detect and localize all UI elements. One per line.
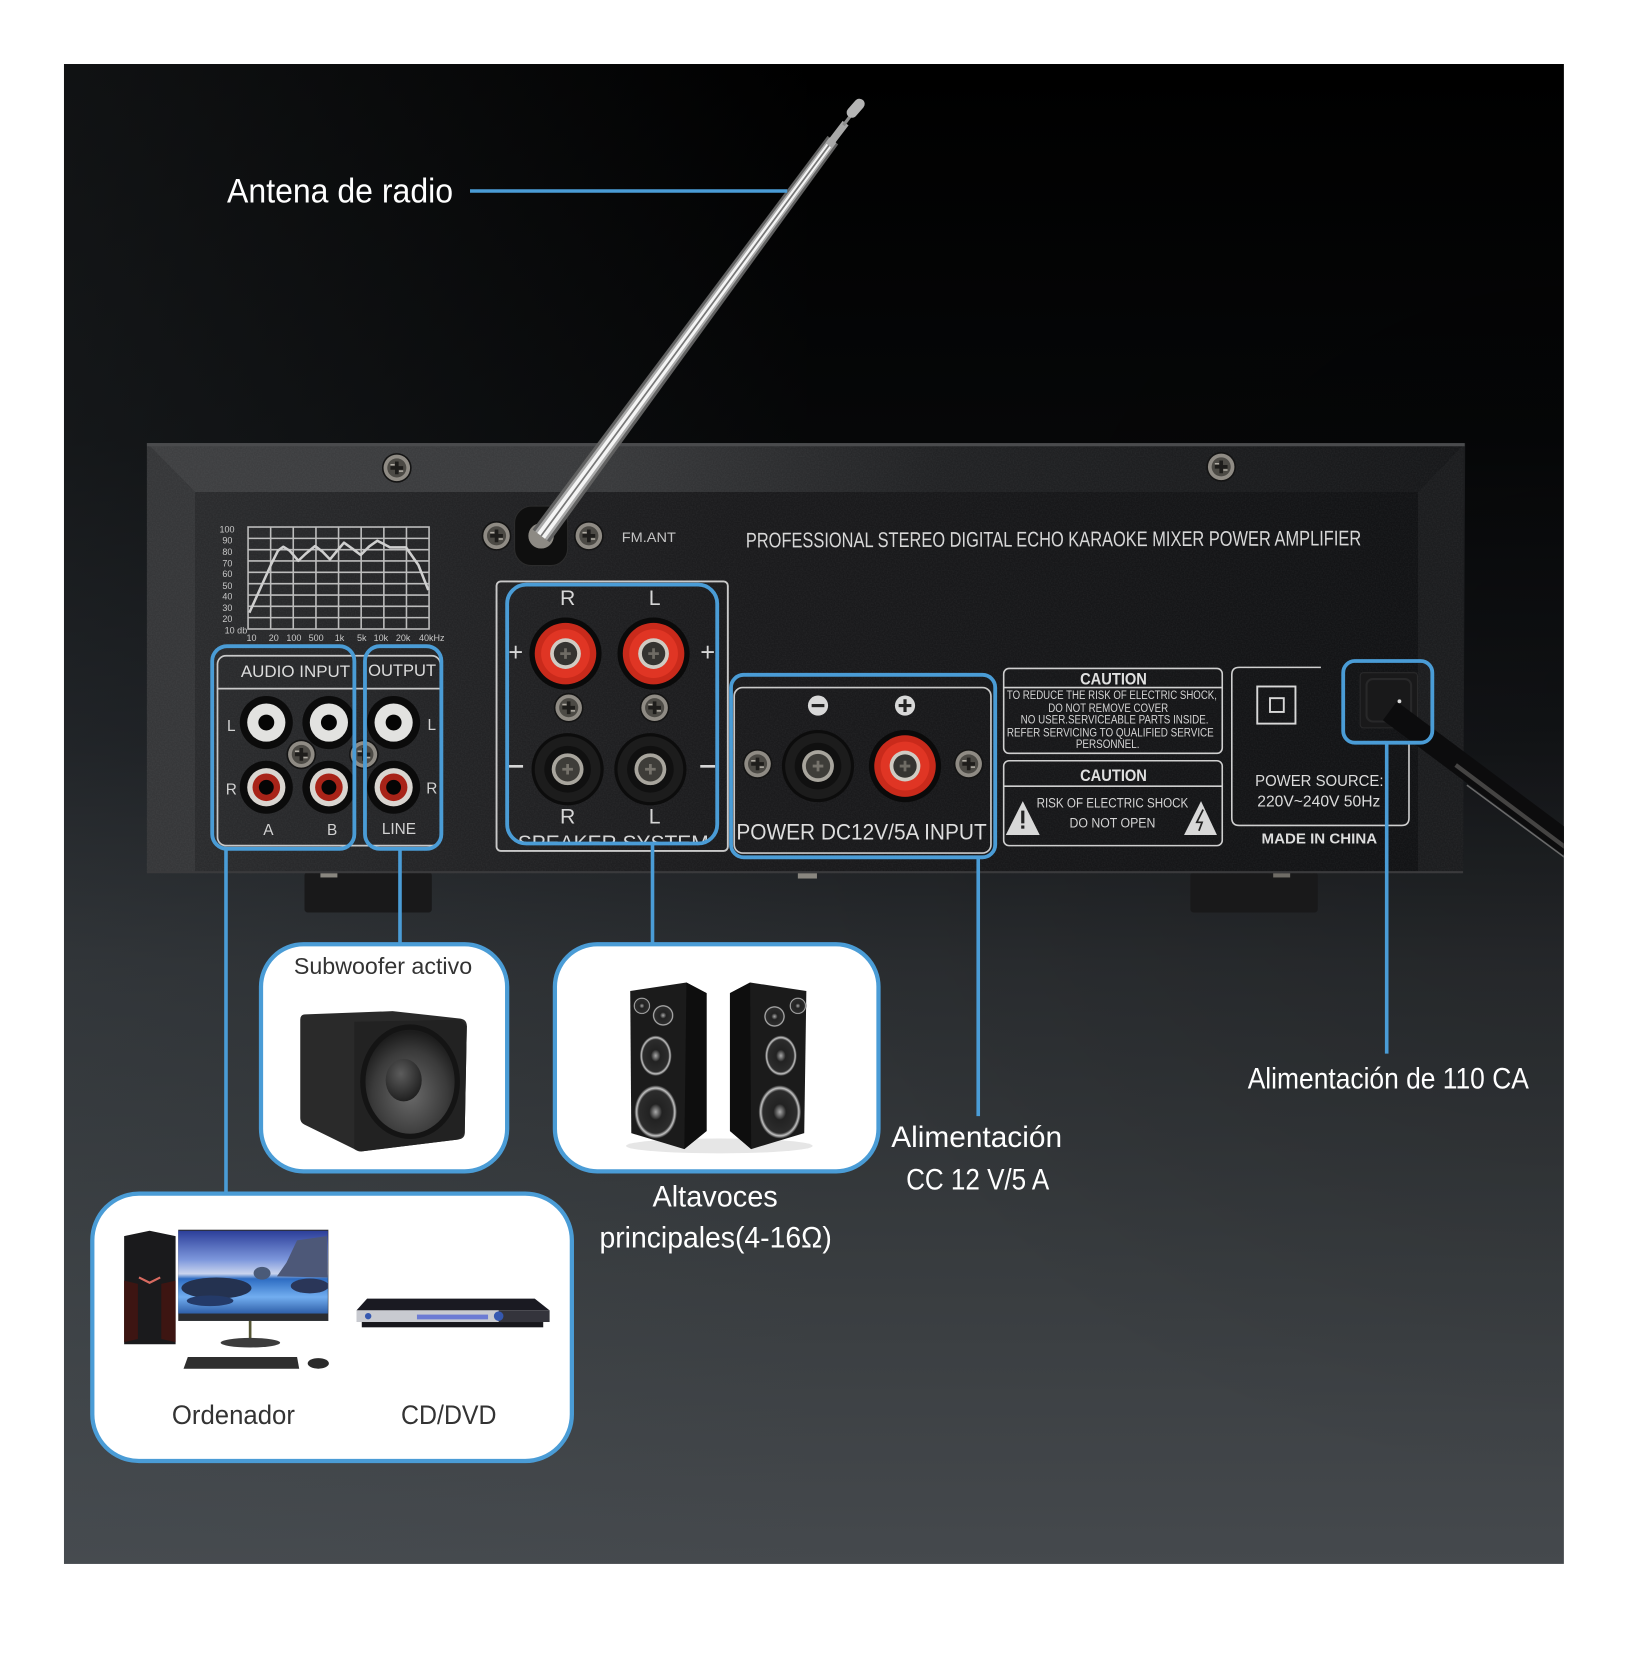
fm antenna label: FM.ANT (622, 530, 676, 545)
icon: subwoofer (300, 1011, 467, 1151)
frequency response chart (219, 525, 445, 643)
amplifier body (147, 443, 1465, 912)
caution label: electric shock instructions: NO USER.SERVICEABLE PARTS INSIDE. (1021, 713, 1208, 727)
card: computer and cd/dvd player: Ordenador (172, 1400, 295, 1430)
label: main speakers (599, 1180, 832, 1255)
caution label: electric shock instructions: PERSONNEL. (1076, 737, 1139, 751)
label: dc power: Alimentación (891, 1121, 1062, 1154)
power source panel: MADE IN CHINA (1262, 832, 1377, 848)
icon: cd/dvd player (356, 1299, 550, 1327)
label: ac power: Alimentación de 110 CA (1248, 1063, 1529, 1096)
audio input and output panel: LINE (382, 821, 416, 838)
audio input and output panel: AUDIO INPUT (241, 663, 350, 681)
frequency response chart: 80 (222, 547, 232, 557)
icon: tower speakers (626, 983, 813, 1153)
frequency response chart: 40kHz (419, 633, 445, 643)
power source panel (1232, 667, 1409, 848)
card: computer and cd/dvd player: CD/DVD (401, 1400, 497, 1430)
frequency response chart: 70 (222, 559, 232, 569)
power source panel: 220V~240V 50Hz (1257, 793, 1380, 810)
frequency response chart: 90 (222, 535, 232, 545)
frequency response chart: 30 (222, 603, 232, 613)
frequency response chart: 5k (357, 633, 367, 643)
icon: computer (124, 1230, 329, 1369)
caution label: risk of electric shock: DO NOT OPEN (1069, 816, 1155, 831)
amplifier title text: PROFESSIONAL STEREO DIGITAL ECHO KARAOKE MIXER POWER AMPLIFIER (746, 527, 1361, 552)
speaker output panel: SPEAKER SYSTEM (518, 832, 709, 855)
card: main speakers (555, 944, 878, 1171)
label: radio antenna: Antena de radio (227, 173, 453, 211)
antenna mount (482, 506, 604, 566)
label: dc power (891, 1121, 1062, 1196)
audio input and output panel: L (227, 718, 236, 735)
speaker output panel: R (560, 587, 575, 610)
speaker output panel (497, 581, 728, 855)
frequency response chart: 20 (269, 633, 279, 643)
caution label: risk of electric shock (1004, 761, 1222, 846)
audio input and output panel (218, 656, 440, 846)
audio input and output panel: L (428, 717, 437, 734)
power plug and cord (1360, 673, 1570, 862)
card: computer and cd/dvd player (92, 1194, 572, 1461)
card: subwoofer: Subwoofer activo (294, 953, 472, 979)
audio input and output panel: B (327, 822, 337, 839)
frequency response chart: 20k (396, 633, 411, 643)
card: subwoofer (261, 944, 507, 1171)
caution label: electric shock instructions: DO NOT REMOVE COVER (1048, 701, 1168, 715)
caution label: electric shock instructions: REFER SERVICING TO QUALIFIED SERVICE (1007, 725, 1214, 739)
caution label: risk of electric shock: RISK OF ELECTRIC SHOCK (1037, 795, 1189, 810)
frequency response chart: 1k (335, 633, 345, 643)
audio input and output panel: A (263, 822, 274, 839)
speaker output panel: L (649, 587, 661, 610)
dc power input panel (734, 688, 991, 853)
frequency response chart: 60 (222, 569, 232, 579)
caution label: electric shock instructions (1004, 668, 1222, 753)
audio input and output panel: OUTPUT (368, 662, 436, 680)
speaker output panel: R (560, 805, 575, 828)
frequency response chart: 10 (246, 633, 256, 643)
audio input and output panel: R (426, 781, 437, 798)
label: dc power: CC 12 V/5 A (906, 1163, 1049, 1196)
speaker output panel: + (700, 639, 715, 667)
frequency response chart: 10k (374, 633, 389, 643)
frequency response chart: 500 (309, 633, 324, 643)
speaker output panel: + (508, 639, 523, 667)
callout connector lines (226, 191, 1387, 1194)
dc power input panel: POWER DC12V/5A INPUT (736, 819, 987, 844)
caution label: electric shock instructions: CAUTION (1080, 670, 1147, 688)
highlight frames (212, 585, 1432, 857)
audio input and output panel: R (226, 782, 237, 799)
label: main speakers: Altavoces (653, 1180, 778, 1213)
frequency response chart: 10 db (225, 625, 247, 635)
speaker output panel: L (649, 805, 661, 828)
frequency response chart: 100 (219, 525, 234, 535)
caution label: risk of electric shock: CAUTION (1080, 767, 1147, 785)
frequency response chart: 50 (222, 581, 232, 591)
frequency response chart: 100 (286, 633, 301, 643)
caution label: electric shock instructions: TO REDUCE THE RISK OF ELECTRIC SHOCK, (1007, 688, 1217, 702)
frequency response chart: 20 (222, 614, 232, 624)
frequency response chart: 40 (222, 591, 232, 601)
label: main speakers: principales(4-16Ω) (599, 1222, 832, 1255)
power source panel: POWER SOURCE: (1255, 773, 1384, 790)
telescopic antenna (533, 104, 859, 542)
